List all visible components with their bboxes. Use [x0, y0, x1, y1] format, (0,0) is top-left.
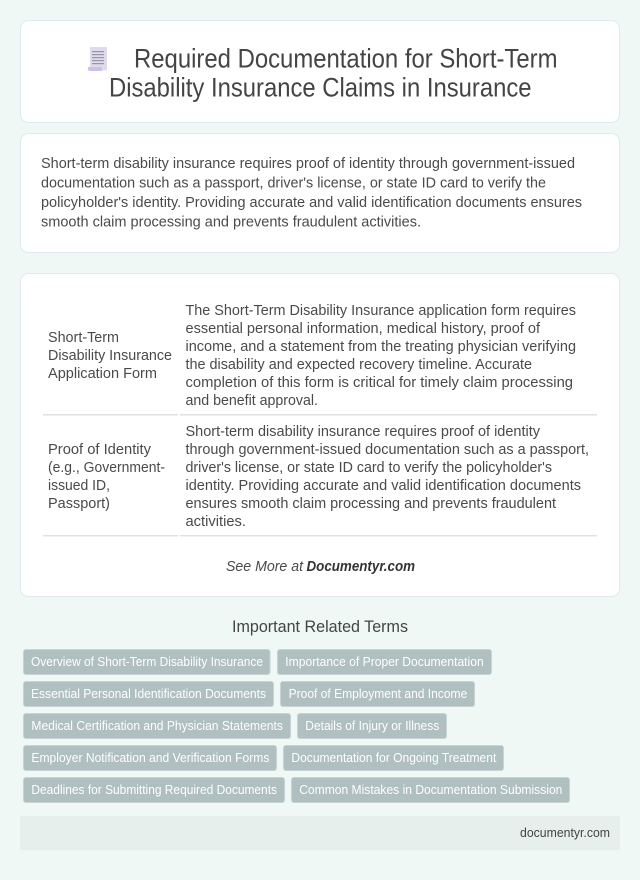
chip: medical certification [24, 714, 290, 738]
row label: proof of identity [48, 442, 165, 512]
see more link: Documentyr.com [306, 559, 415, 575]
see more link: See More at [226, 559, 304, 575]
chip: employer notification [24, 746, 276, 770]
row description: proof of identity: Short-term disability insurance requires proof of identity [186, 424, 541, 440]
chip: employment and income [280, 682, 474, 706]
row description: proof of identity: driver's license, or state ID card to verify the policyholder's [186, 460, 552, 476]
row description: application form: income, and a statement from the treating physician verifying [186, 339, 576, 355]
row description: proof of identity: activities. [186, 514, 246, 530]
icon: document scroll [88, 47, 107, 71]
chip: common mistakes: Common Mistakes in Documentation Submission [299, 782, 562, 797]
row label: proof of identity: Passport) [48, 496, 110, 512]
chip: importance: Importance of Proper Documentation [285, 654, 484, 669]
chip: identification documents [24, 682, 274, 706]
panel: introduction [20, 134, 620, 252]
title: Disability Insurance Claims in Insurance [109, 72, 532, 102]
panel: related term chips [24, 650, 570, 802]
chip: common mistakes [292, 778, 570, 802]
chip: medical certification: Medical Certification and Physician Statements [31, 718, 283, 733]
see more link [226, 559, 415, 575]
footer [20, 816, 620, 850]
row label: application form: Application Form [48, 366, 157, 382]
row description: application form [186, 303, 576, 409]
chip: importance [278, 650, 492, 674]
table row: proof of identity [48, 424, 589, 530]
footer: documentyr.com [520, 825, 610, 840]
heading: important related terms: Important Related Terms [232, 618, 408, 636]
panel: documentation table [20, 274, 620, 596]
chip: identification documents: Essential Personal Identification Documents [31, 686, 266, 701]
row description: application form: essential personal information, medical history, proof of [186, 321, 541, 337]
table row: application form [48, 303, 576, 409]
row description: proof of identity [186, 424, 589, 530]
row label: proof of identity: Proof of Identity [48, 442, 152, 458]
chip: employment and income: Proof of Employment and Income [289, 686, 467, 701]
chip: overview: Overview of Short-Term Disability Insurance [31, 654, 263, 669]
row description: proof of identity: through government-issued documentation such as a passport, [186, 442, 589, 458]
panel: title card [20, 20, 620, 122]
text block: introduction [41, 156, 582, 230]
text block: introduction: policyholder's identity. Providing accurate and valid identification documents ensures [41, 195, 582, 211]
chip: injury or illness [298, 714, 446, 738]
text block: introduction: smooth claim processing and prevents fraudulent activities. [41, 214, 421, 230]
title [109, 44, 558, 102]
row label: application form [48, 330, 172, 382]
row description: application form: the disability and expected recovery timeline. Accurate [186, 357, 532, 373]
chip: injury or illness: Details of Injury or Illness [305, 718, 439, 733]
row label: application form: Short-Term [48, 330, 119, 346]
chip: overview [24, 650, 270, 674]
row description: proof of identity: ensures smooth claim processing and prevents fraudulent [186, 496, 556, 512]
row label: proof of identity: issued ID, [48, 478, 110, 494]
chip: ongoing treatment [284, 746, 504, 770]
text block: introduction: documentation such as a passport, driver's license, or state ID card to verify the [41, 176, 546, 192]
row description: application form: and benefit approval. [186, 393, 318, 409]
row description: application form: The Short-Term Disability Insurance application form requires [186, 303, 576, 319]
row label: application form: Disability Insurance [48, 348, 172, 364]
row label: proof of identity: (e.g., Government- [48, 460, 165, 476]
row description: proof of identity: identity. Providing accurate and valid identification documents [186, 478, 581, 494]
chip: ongoing treatment: Documentation for Ongoing Treatment [291, 750, 497, 765]
chip: deadlines: Deadlines for Submitting Required Documents [31, 782, 277, 797]
title: Required Documentation for Short-Term [134, 44, 558, 74]
row description: application form: completion of this form is critical for timely claim processing [186, 375, 573, 391]
chip: employer notification: Employer Notification and Verification Forms [31, 750, 269, 765]
chip: deadlines [24, 778, 284, 802]
text block: introduction: Short-term disability insurance requires proof of identity through government-issued [41, 156, 575, 172]
